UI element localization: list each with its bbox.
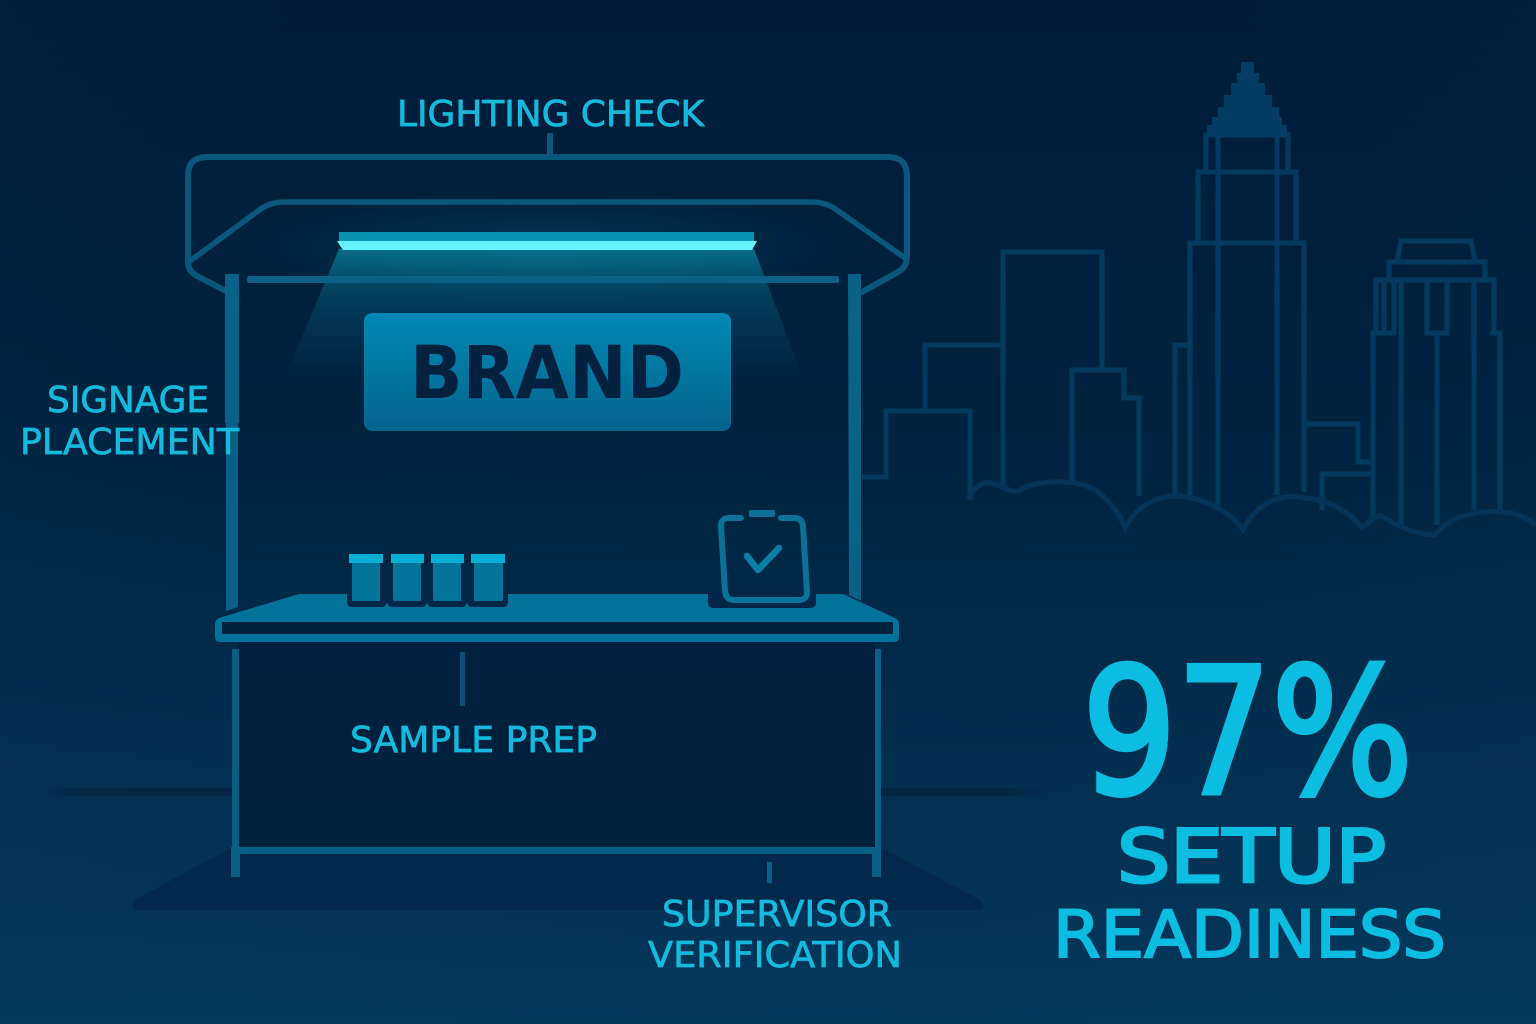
sample jars (347, 554, 508, 607)
signage placement callout (20, 380, 240, 463)
floor shadow (132, 847, 983, 910)
counter (215, 594, 899, 642)
jar 3 (431, 554, 464, 601)
left post (225, 274, 239, 611)
sample prep callout (350, 652, 597, 761)
canopy beam (247, 276, 839, 283)
jar shadow (347, 592, 508, 607)
jar 4 (471, 554, 505, 601)
sample prep callout: SAMPLE PREP (350, 720, 597, 761)
stat number: 97% (1082, 632, 1413, 835)
clipboard outline (721, 518, 807, 600)
light cone (288, 249, 800, 380)
horizon line right (880, 788, 1052, 796)
supervisor verification callout (648, 862, 902, 976)
stat label line 2: READINESS (1053, 898, 1446, 973)
brand sign: BRAND (410, 331, 684, 416)
cabinet right leg (872, 649, 881, 877)
jar 1 (349, 554, 383, 601)
lighting check callout (397, 94, 705, 157)
supervisor verification callout: SUPERVISOR (662, 894, 892, 935)
signage placement callout: PLACEMENT (20, 422, 240, 463)
fog clouds line (968, 482, 1536, 535)
light fixture (337, 232, 757, 250)
check mark (747, 548, 779, 570)
booth (188, 157, 907, 877)
lighting check callout: LIGHTING CHECK (397, 94, 705, 135)
clipboard shadow (708, 590, 816, 608)
light glow (226, 190, 866, 300)
brand sign (364, 313, 731, 431)
canopy (188, 157, 907, 292)
key stat: 97% setup readiness (1053, 632, 1446, 973)
cabinet left leg (231, 649, 240, 877)
skyline outline (862, 62, 1536, 535)
signage placement callout: SIGNAGE (47, 380, 209, 421)
right post (848, 274, 861, 601)
supervisor verification callout: VERIFICATION (648, 935, 902, 976)
building: left block group (862, 252, 1139, 500)
building: low annex (1304, 424, 1373, 510)
building: right tower (1373, 241, 1500, 525)
building: central tower (1175, 62, 1304, 510)
lower cabinet (238, 642, 875, 847)
stat label line 1: SETUP (1117, 815, 1386, 900)
cabinet bottom rail (238, 847, 875, 854)
horizon line left (36, 788, 234, 796)
clipboard clip (749, 510, 775, 517)
jar 2 (391, 554, 424, 601)
clipboard (708, 510, 816, 608)
